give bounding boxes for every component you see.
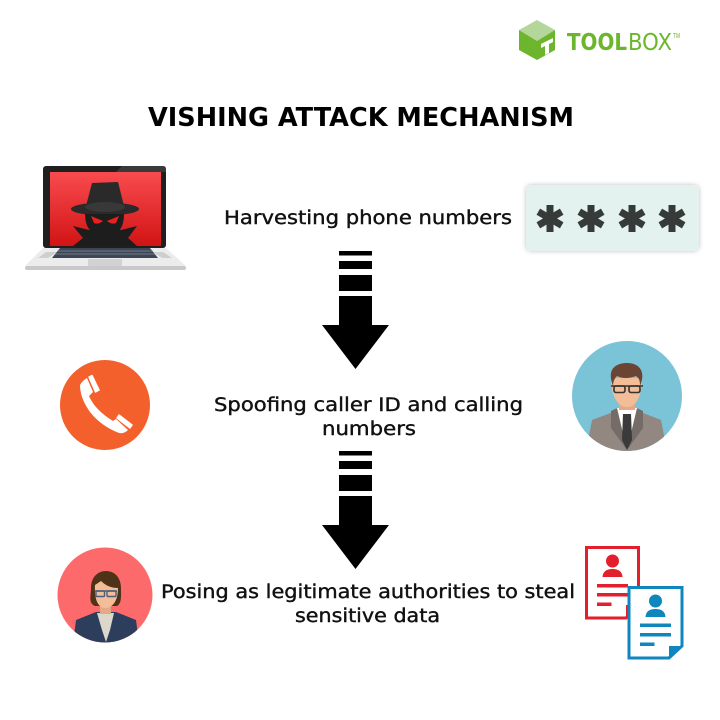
text: step 2 [214,395,523,440]
title: VISHING ATTACK MECHANISM [148,103,574,133]
asterisk 2 [579,205,603,232]
logo: Toolbox: TM [673,33,680,40]
hacker figure [71,182,139,246]
icon: documents [586,548,682,658]
blue document [629,588,682,658]
arrow 1 [322,251,389,369]
icon: password card [526,185,699,251]
text: step 2: numbers [322,419,416,440]
text: step 1: Harvesting phone numbers [224,208,512,229]
asterisk 1 [538,205,562,232]
text: step 3: sensitive data [295,606,440,627]
icon: woman avatar [58,548,152,643]
logo: Toolbox [519,20,680,60]
red document [586,548,638,618]
logo: Toolbox: TOOL [567,30,627,56]
logo: Toolbox: BOX [628,30,672,56]
arrow 2 [322,451,389,569]
asterisk 3 [620,205,644,232]
asterisk 4 [660,205,684,232]
text: step 3 [161,582,575,627]
icon: phone [60,360,150,450]
text: step 2: Spoofing caller ID and calling [214,395,523,416]
icon: man avatar [572,341,682,451]
text: step 3: Posing as legitimate authorities to steal [161,582,575,603]
icon: hacker laptop [25,166,186,270]
